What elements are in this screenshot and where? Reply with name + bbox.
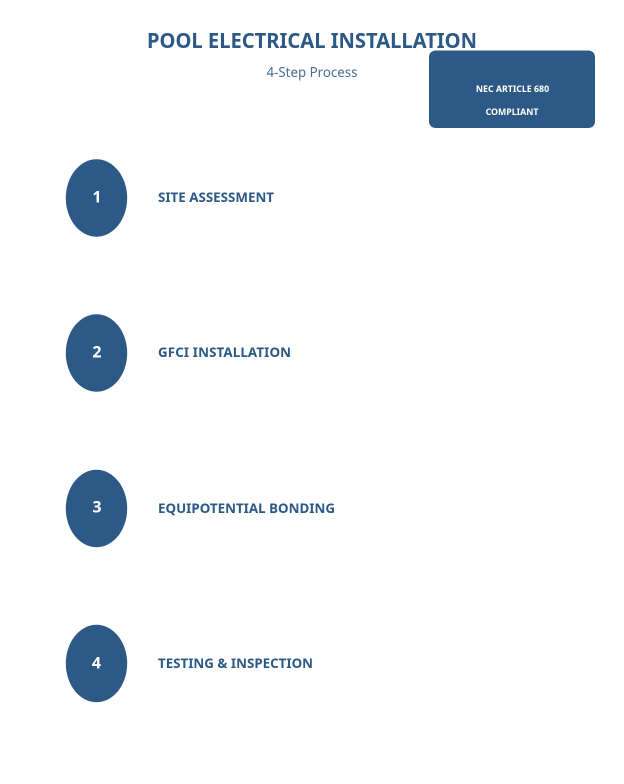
step 4: 4 [92,652,101,674]
badge: NEC compliance [429,50,595,128]
step 4 [66,625,313,702]
badge: NEC compliance: COMPLIANT [486,106,538,118]
step 3: 3 [92,496,102,518]
step 3: EQUIPOTENTIAL BONDING [158,499,335,517]
step 1: SITE ASSESSMENT [158,188,274,206]
step 4: TESTING & INSPECTION [158,654,313,672]
step 3 [66,470,335,547]
step 2 [66,314,291,392]
step 2: GFCI INSTALLATION [158,343,291,361]
subtitle: 4-Step Process [266,63,358,81]
badge: NEC compliance: NEC ARTICLE 680 [476,83,549,95]
step 1: 1 [92,186,102,208]
step 1 [66,159,274,237]
step 2: 2 [92,340,102,362]
title: POOL ELECTRICAL INSTALLATION [147,26,477,54]
